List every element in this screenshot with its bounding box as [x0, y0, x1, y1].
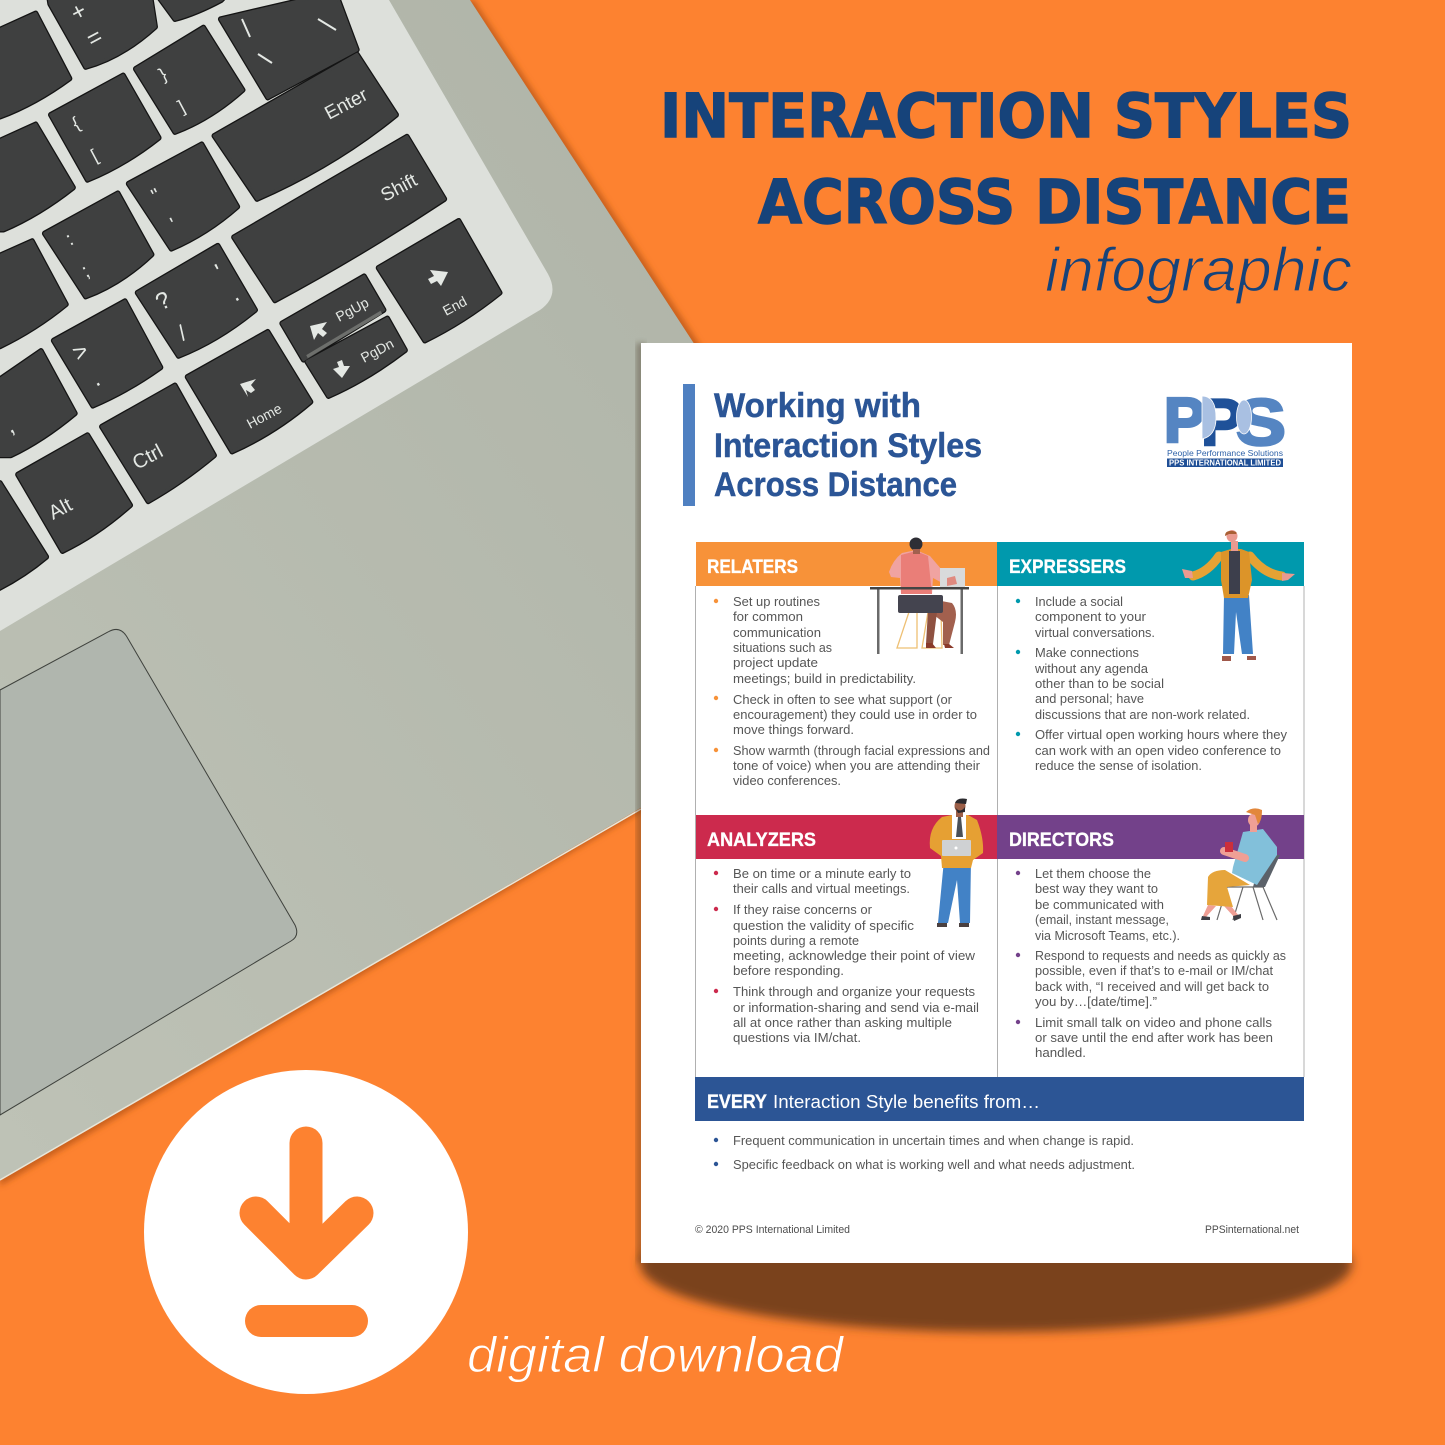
PPS logo [1164, 385, 1286, 468]
caption: digital download: digital download [467, 1327, 845, 1383]
relaters text: project update [733, 655, 818, 670]
relaters text: for common [733, 609, 803, 624]
expressers header [997, 542, 1304, 586]
every bullets [714, 1138, 718, 1166]
expressers text: Make connections [1035, 645, 1139, 660]
panel: directors: DIRECTORS [1009, 830, 1114, 851]
analyzers text: meeting, acknowledge their point of view [733, 948, 976, 963]
figure: person at desk [870, 538, 969, 654]
grid lines [696, 586, 1304, 1077]
directors text: possible, even if that’s to e-mail or IM/chat [1035, 963, 1273, 978]
document page [641, 343, 1352, 1263]
directors text: Let them choose the [1035, 866, 1151, 881]
expressers text: component to your [1035, 609, 1147, 624]
directors text: best way they want to [1035, 881, 1158, 896]
directors text [1035, 866, 1286, 1060]
key labels: . [225, 280, 244, 307]
key labels: Shift [377, 170, 422, 206]
panel: every interaction style: Interaction Style benefits from… [773, 1091, 1040, 1112]
expressers bullets [1016, 599, 1020, 736]
key labels: Enter [321, 84, 372, 124]
trackpad [0, 629, 297, 1115]
panel: relaters [696, 538, 997, 788]
key labels: ' [167, 214, 181, 235]
laptop photo [0, 0, 905, 1186]
expressers text: and personal; have [1035, 691, 1144, 706]
every text: Specific feedback on what is working well and what needs adjustment. [733, 1157, 1135, 1172]
directors text: Limit small talk on video and phone calls [1035, 1015, 1273, 1030]
key labels: : [62, 228, 77, 250]
relaters bullets [714, 599, 718, 752]
figure: man holding laptop [930, 798, 983, 927]
relaters text: Show warmth (through facial expressions and [733, 743, 990, 758]
key labels: PgDn [358, 335, 396, 366]
key labels: { [68, 113, 83, 134]
footer: PPSinternational.net [1205, 1224, 1299, 1236]
directors text: via Microsoft Teams, etc.). [1035, 928, 1180, 943]
page sheet [641, 343, 1352, 1263]
PPS logo: P [1201, 385, 1243, 459]
relaters text: video conferences. [733, 773, 841, 788]
document title: Interaction Styles [714, 427, 982, 465]
analyzers text: Be on time or a minute early to [733, 866, 911, 881]
key labels: Ctrl [129, 440, 167, 474]
keyboard keys [0, 0, 500, 593]
key labels: [ [87, 146, 101, 166]
analyzers text: all at once rather than asking multiple [733, 1015, 952, 1030]
key labels: ' [211, 259, 228, 285]
subtitle: infographic: infographic [1045, 236, 1352, 305]
key labels: Home [244, 400, 285, 432]
panel: analyzers [696, 798, 997, 1045]
PPS logo: P [1164, 386, 1205, 456]
key labels: End [440, 293, 469, 319]
panel: expressers: EXPRESSERS [1009, 557, 1126, 578]
expressers text: Offer virtual open working hours where they [1035, 727, 1287, 742]
panel: directors [997, 808, 1304, 1060]
key labels: > [68, 337, 93, 367]
relaters text: Set up routines [733, 594, 820, 609]
every text: Frequent communication in uncertain times and when change is rapid. [733, 1133, 1134, 1148]
expressers text [1034, 594, 1287, 773]
expressers text: virtual conversations. [1035, 625, 1155, 640]
key labels: . [86, 365, 105, 392]
directors bullets [1016, 871, 1020, 1024]
directors text: back with, “I received and will get back to [1035, 979, 1269, 994]
paper shadow [640, 1196, 1352, 1332]
key labels: Alt [45, 494, 76, 524]
relaters text: move things forward. [733, 722, 854, 737]
expressers text: can work with an open video conference to [1035, 743, 1281, 758]
PPS logo: PPS INTERNATIONAL LIMITED [1169, 458, 1281, 468]
key labels: = [82, 23, 107, 53]
key labels [0, 0, 469, 524]
relaters text: situations such as [733, 640, 832, 655]
key labels: ? [151, 286, 176, 316]
directors text: handled. [1035, 1045, 1086, 1060]
keyboard bezel [0, 0, 552, 631]
every text [733, 1133, 1135, 1172]
analyzers text: Think through and organize your requests [733, 984, 975, 999]
key labels: } [155, 64, 170, 85]
relaters text: meetings; build in predictability. [733, 671, 916, 686]
analyzers text: question the validity of specific [733, 918, 915, 933]
accent bar [683, 384, 695, 506]
relaters text: encouragement) they could use in order to [733, 707, 977, 722]
relaters text: tone of voice) when you are attending their [733, 758, 981, 773]
analyzers text: before responding. [733, 963, 844, 978]
analyzers text: If they raise concerns or [733, 902, 873, 917]
key labels: , [0, 412, 19, 439]
main title: ACROSS DISTANCE [758, 167, 1351, 238]
panel: analyzers: ANALYZERS [707, 830, 816, 851]
analyzers header [696, 815, 997, 859]
analyzers text: their calls and virtual meetings. [733, 881, 910, 896]
laptop lower edge highlight [0, 809, 641, 1180]
analyzers text: or information-sharing and send via e-mail [733, 1000, 979, 1015]
paper side shadow [636, 343, 646, 1263]
analyzers text [733, 866, 979, 1045]
document title [714, 387, 982, 504]
analyzers text: questions via IM/chat. [733, 1030, 861, 1045]
main title [660, 81, 1352, 238]
panel: expressers [997, 530, 1304, 773]
PPS logo: S [1236, 385, 1286, 459]
relaters text: communication [733, 625, 821, 640]
PPS logo: People Performance Solutions [1167, 448, 1283, 458]
relaters text [733, 594, 990, 788]
footer [695, 1224, 1299, 1236]
backslash key marks [242, 19, 336, 63]
key labels: PgUp [333, 294, 372, 325]
key labels: ] [174, 97, 188, 117]
expressers text: other than to be social [1035, 676, 1164, 691]
document title: Across Distance [714, 466, 957, 504]
arrow glyphs on keys [428, 270, 448, 286]
document title: Working with [714, 387, 921, 425]
figure: standing man with open arms [1182, 530, 1295, 661]
directors header [997, 815, 1304, 859]
analyzers bullets [714, 871, 718, 993]
panel: relaters: RELATERS [707, 557, 798, 578]
directors text: be communicated with [1035, 897, 1164, 912]
key labels: / [174, 320, 192, 345]
expressers text: discussions that are non-work related. [1035, 707, 1250, 722]
key labels: " [148, 185, 165, 207]
key labels: ; [78, 260, 93, 282]
footer: © 2020 PPS International Limited [695, 1224, 850, 1236]
panel: every interaction style [695, 1077, 1304, 1172]
expressers text: reduce the sense of isolation. [1035, 758, 1202, 773]
laptop shadow [0, 0, 905, 1186]
directors text: Respond to requests and needs as quickly as [1035, 948, 1286, 963]
analyzers text: points during a remote [733, 933, 859, 948]
laptop body [0, 0, 899, 1180]
panel: every interaction style: EVERY [707, 1092, 767, 1113]
expressers text: without any agenda [1034, 661, 1149, 676]
relaters header [696, 542, 997, 586]
figure: seated person with mug [1201, 808, 1280, 921]
directors text: you by…[date/time].” [1035, 994, 1157, 1009]
directors text: or save until the end after work has been [1035, 1030, 1273, 1045]
relaters text: Check in often to see what support (or [733, 692, 953, 707]
every header bar [695, 1077, 1304, 1121]
icon: download [144, 1070, 468, 1394]
directors text: (email, instant message, [1035, 912, 1169, 927]
expressers text: Include a social [1035, 594, 1123, 609]
main title: INTERACTION STYLES [660, 81, 1352, 152]
